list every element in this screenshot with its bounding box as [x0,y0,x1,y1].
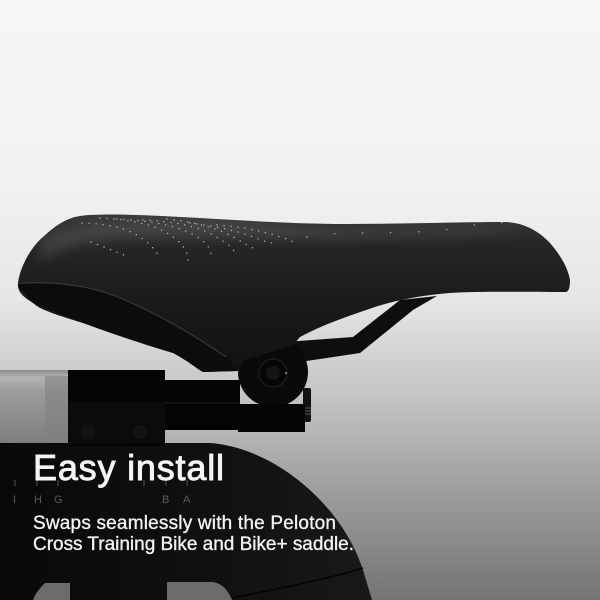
faint scale marks on frame: H [34,494,42,506]
saddle clamp hub [238,337,308,432]
product scene: saddle on bike with caption [0,214,600,600]
bike frame: lower windows [30,578,235,600]
bike frame: large elbow tube [0,443,372,600]
faint scale marks on frame: B [162,494,169,506]
caption text: Swaps seamlessly with the Peloton [33,513,336,534]
title: Easy install [33,447,224,488]
bike frame: elbow seam [232,568,363,598]
saddle: top highlight [38,219,442,259]
faint scale marks on frame: G [54,494,63,506]
saddle: lower shell rim [17,283,238,372]
saddle rail [285,296,437,364]
saddle body [18,214,570,372]
bike frame: clamp block with bolts [68,370,165,446]
caption text [33,513,354,555]
bike frame: left tube band [0,370,70,445]
seat post horizontal tube [165,380,311,430]
faint scale marks on frame: I [13,494,16,506]
caption text: Cross Training Bike and Bike+ saddle. [33,534,354,555]
faint scale marks on frame [13,480,191,506]
faint scale marks on frame: A [183,494,191,506]
saddle: rim highlight [20,283,226,357]
saddle: perforation dots [82,218,502,262]
